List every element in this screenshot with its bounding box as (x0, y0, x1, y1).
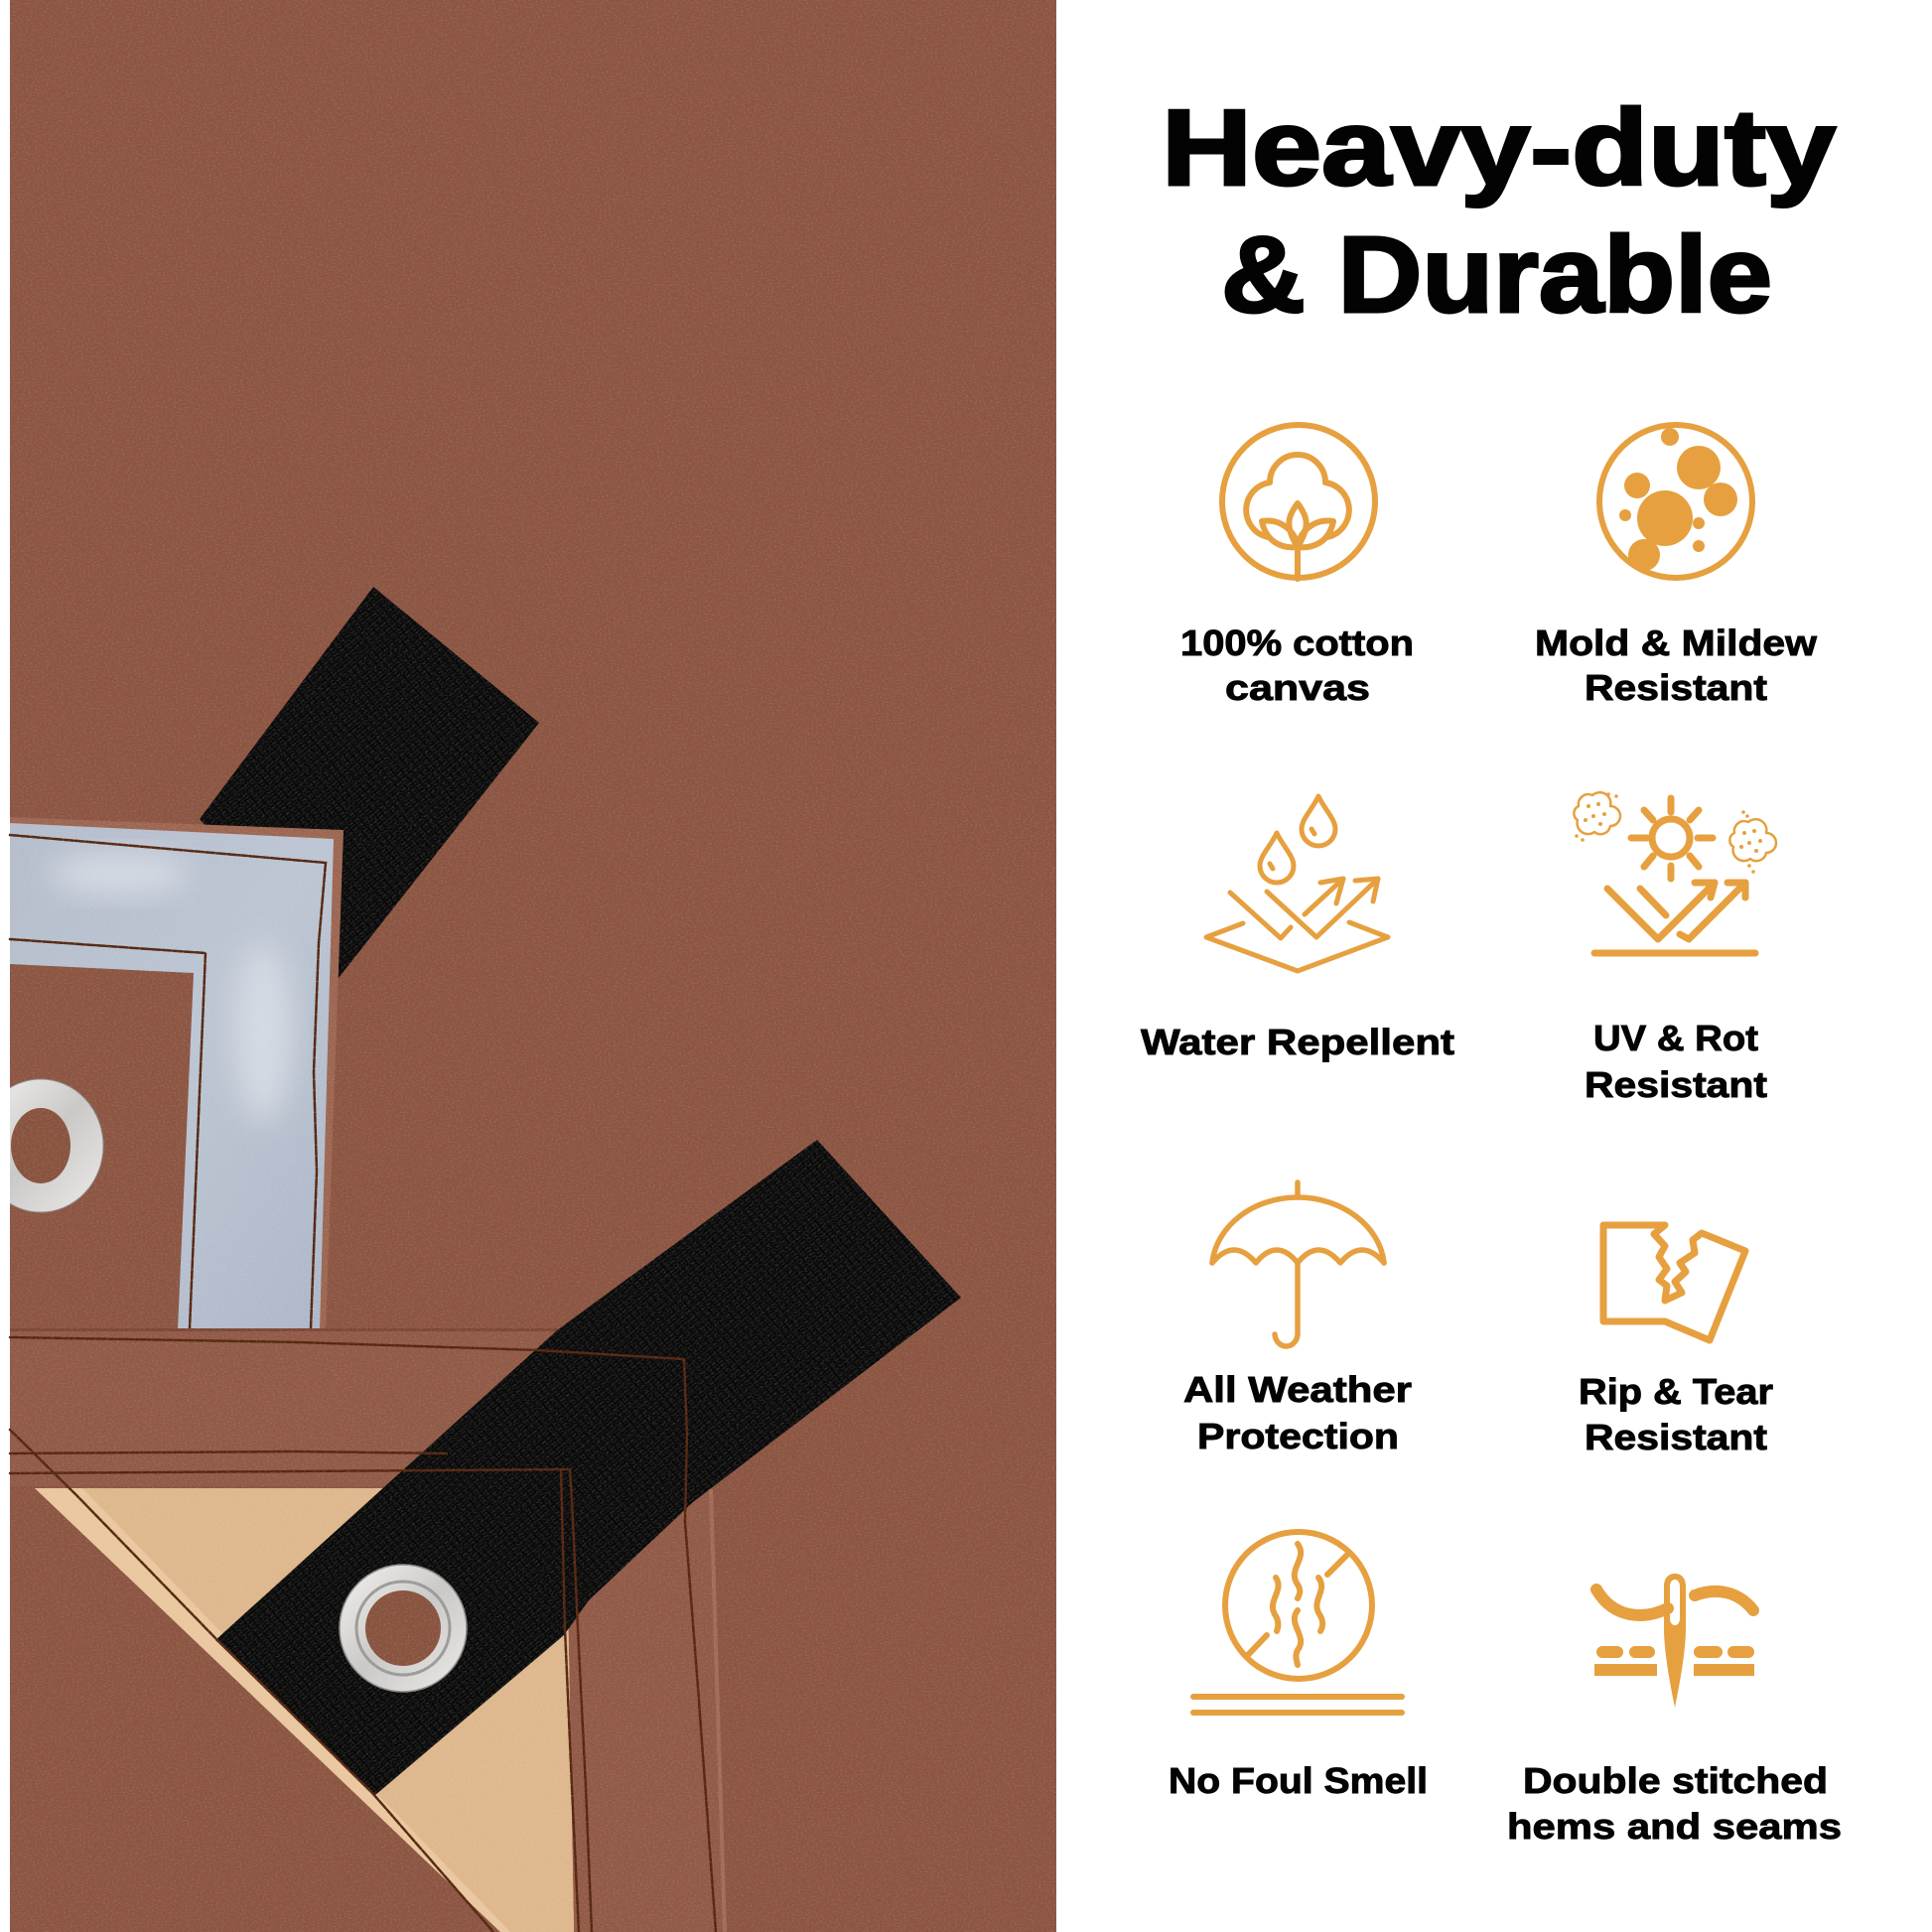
tan backing triangle (35, 1488, 574, 1932)
title: & Durable (1221, 214, 1772, 336)
label: cotton (1180, 622, 1414, 708)
label: UV (1585, 1018, 1767, 1105)
label: water: Water Repellent (1141, 1022, 1454, 1062)
icon: no foul smell (1193, 1532, 1402, 1713)
icon: water repellent (1206, 796, 1388, 971)
icon: mold and mildew (1599, 425, 1752, 578)
icon: cotton (1222, 425, 1375, 579)
icon: upper webbing strap (200, 587, 539, 978)
icon: needle and stitches (1594, 1574, 1754, 1708)
panel: canvas tarp photo (0, 0, 1056, 1932)
icon: lower grommet (340, 1565, 467, 1692)
label: UV: UV & Rot (1593, 1018, 1758, 1058)
icon: umbrella (1212, 1182, 1384, 1346)
label: double stitched: Double stitched (1523, 1760, 1828, 1801)
title: Heavy-duty (1162, 87, 1836, 208)
label: double stitched (1507, 1760, 1842, 1847)
hem stitching (10, 1337, 716, 1932)
fabric grain (10, 0, 1056, 1932)
label: all weather: All Weather (1183, 1369, 1412, 1410)
label: double stitched: hems and seams (1507, 1806, 1842, 1847)
fabric base (10, 0, 1056, 1932)
label: cotton: 100% cotton (1180, 622, 1414, 663)
label: rip: Resistant (1585, 1417, 1767, 1457)
label: cotton: canvas (1225, 667, 1370, 708)
label: mold: Resistant (1585, 667, 1767, 708)
title (1162, 87, 1836, 336)
label: rip (1579, 1371, 1773, 1457)
icon: ripped fabric (1603, 1225, 1745, 1340)
icon: lower webbing strap (215, 1140, 961, 1795)
icon: upper grommet (0, 1079, 103, 1212)
label: UV: Resistant (1585, 1064, 1767, 1105)
icon: UV and rot (1574, 792, 1776, 953)
label: mold (1535, 622, 1818, 708)
upper reinforced corner panel (10, 817, 344, 1330)
label: all weather (1183, 1369, 1412, 1456)
label: mold: Mold & Mildew (1535, 622, 1818, 663)
label: rip: Rip & Tear (1579, 1371, 1773, 1412)
lower hem band (10, 1328, 727, 1932)
label: all weather: Protection (1197, 1416, 1399, 1456)
label: no foul smell: No Foul Smell (1169, 1760, 1428, 1801)
